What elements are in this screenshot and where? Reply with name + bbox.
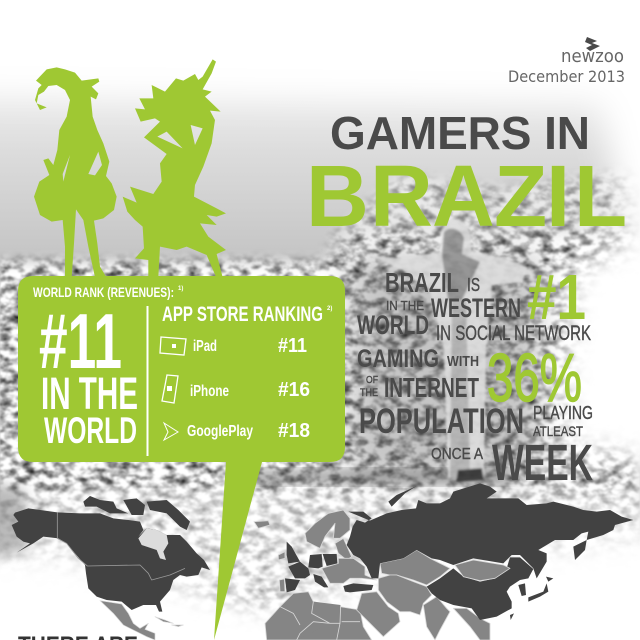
text block: Brazil social network gaming statistic: OF — [366, 375, 378, 386]
map region: North America — [12, 496, 210, 640]
icon: tablet — [160, 337, 186, 355]
footnote marker: 1) — [178, 286, 183, 292]
icon: play — [164, 423, 178, 440]
label: GooglePlay: GooglePlay — [187, 423, 253, 440]
in the: IN THE — [41, 368, 138, 419]
text block: Brazil social network gaming statistic: PLAYING — [533, 403, 593, 423]
text block: Brazil social network gaming statistic: THE — [360, 387, 378, 399]
Mexico and Caribbean — [100, 601, 183, 640]
Mongolia — [455, 560, 510, 581]
gray countries — [254, 510, 490, 640]
logo wordmark: newzoo — [561, 46, 624, 67]
text block: Brazil social network gaming statistic — [357, 261, 593, 491]
text block: Brazil social network gaming statistic: IS — [467, 275, 480, 295]
text block: Brazil social network gaming statistic: INTERNET — [384, 372, 479, 403]
panel: world rank — [18, 276, 345, 640]
title: Gamers in: GAMERS IN — [330, 107, 590, 159]
illustration: carnival dancer right — [123, 59, 226, 280]
icon: phone — [162, 375, 178, 403]
title: Brazil: BRAZIL — [306, 148, 627, 245]
divider — [146, 306, 148, 456]
illustration: carnival dancer left — [34, 67, 117, 277]
label: iPhone: iPhone — [190, 383, 229, 400]
big rank number: #11 — [39, 297, 122, 385]
rank: iPad: #11 — [278, 335, 307, 357]
map region: Eurasia and Africa — [254, 483, 633, 640]
rank: GooglePlay: #18 — [278, 420, 310, 442]
heading: world rank: WORLD RANK (REVENUES): — [33, 284, 174, 300]
dark countries — [285, 483, 633, 620]
chart: world map — [12, 483, 633, 640]
text block: Brazil social network gaming statistic: WITH — [447, 353, 479, 370]
text block: Brazil social network gaming statistic: ONCE A — [431, 446, 483, 463]
text block: Brazil social network gaming statistic: ATLEAST — [533, 423, 583, 439]
text block: Brazil social network gaming statistic: IN THE — [386, 298, 424, 313]
text block: Brazil social network gaming statistic: 36% — [487, 340, 582, 416]
Hudson Bay — [138, 528, 168, 560]
world: WORLD — [44, 410, 137, 451]
rank: iPhone: #16 — [278, 379, 310, 401]
speech bubble body and pointer — [18, 276, 345, 640]
icon: newzoo mark — [585, 37, 600, 51]
heading: app store ranking: APP STORE RANKING — [162, 303, 323, 326]
date: December 2013 — [508, 67, 625, 86]
text block: Brazil social network gaming statistic: BRAZIL — [385, 267, 459, 298]
text block: Brazil social network gaming statistic: GAMING — [357, 345, 439, 373]
label: iPad: iPad — [193, 338, 217, 355]
footnote marker: 2) — [327, 306, 332, 312]
text block: Brazil social network gaming statistic: WESTERN — [431, 293, 521, 323]
logo: newzoo — [561, 37, 624, 67]
text block: Brazil social network gaming statistic: #1 — [527, 261, 586, 333]
text block: Brazil social network gaming statistic: POPULATION — [359, 402, 524, 441]
statue: Christ the Redeemer — [366, 219, 528, 482]
text block: Brazil social network gaming statistic: WORLD — [357, 310, 429, 340]
Canada and USA — [12, 496, 210, 612]
borders — [57, 512, 185, 580]
